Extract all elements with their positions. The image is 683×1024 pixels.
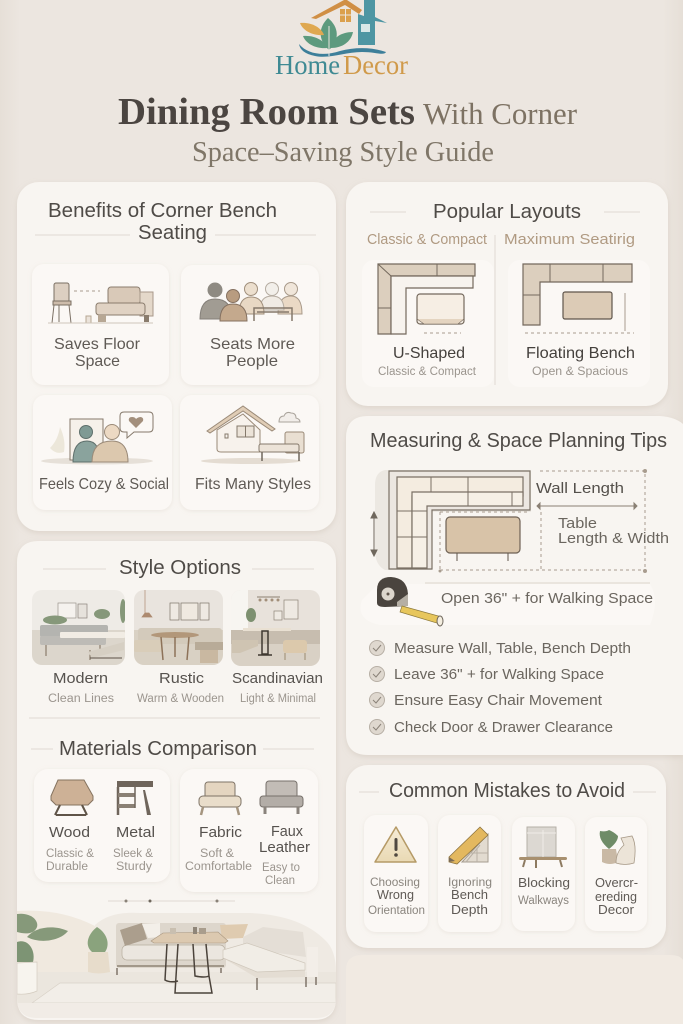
card: floating bench — [508, 260, 650, 387]
check item: Check Door & Drawer Clearance — [394, 719, 613, 736]
icon: warning triangle — [375, 827, 416, 862]
panel: benefits of corner bench seating — [17, 182, 336, 531]
card: fabric and faux leather: Faux — [271, 823, 303, 840]
photo: modern — [32, 590, 126, 665]
heading: benefits: Seating — [138, 222, 207, 244]
card: wrong orientation: Wrong — [377, 887, 414, 902]
style labels: Modern — [53, 670, 108, 687]
card: blocking walkways: Walkways — [518, 895, 569, 907]
card: feels cozy and social: Feels Cozy & Social — [39, 476, 169, 493]
card: fits many styles — [180, 395, 319, 510]
card: blocking walkways: Blocking — [518, 875, 570, 890]
card: wood and metal — [34, 769, 170, 882]
heading: materials comparison: Materials Comparison — [59, 738, 257, 760]
icon: tape measure — [377, 577, 443, 626]
check item: Leave 36" + for Walking Space — [394, 666, 604, 683]
card: fabric and faux leather: Soft & — [200, 848, 234, 860]
card: ignoring bench depth: Depth — [451, 902, 488, 917]
card: overcrowding decor: ereding — [595, 889, 637, 904]
subheads: Maximum Seatirig — [504, 231, 635, 248]
table — [151, 927, 228, 993]
measure labels: Wall Length — [536, 480, 624, 497]
heading: style options: Style Options — [119, 557, 241, 579]
card: saves floor space — [32, 264, 169, 385]
icon: plant and vases — [600, 830, 635, 864]
card: U-shaped — [362, 260, 494, 387]
card: blocking walkways — [512, 817, 575, 931]
plant: small — [88, 927, 110, 974]
title: Space–Saving Style Guide — [192, 136, 494, 168]
card: overcrowding decor: Decor — [598, 902, 635, 917]
card: fabric and faux leather — [180, 769, 318, 892]
check item: Ensure Easy Chair Movement — [394, 692, 603, 709]
card: wrong orientation: Choosing — [370, 875, 420, 889]
decorative lower right block — [346, 955, 683, 1024]
title — [118, 91, 578, 168]
card: floating bench: Floating Bench — [526, 345, 635, 362]
title: With Corner — [423, 96, 578, 131]
strip: walking space — [360, 584, 655, 625]
style labels — [48, 670, 323, 705]
heading: common mistakes: Common Mistakes to Avoid — [389, 780, 625, 802]
card: fabric and faux leather: Easy to — [262, 862, 300, 874]
style labels: Warm & Wooden — [137, 693, 224, 705]
card: seats more people: People — [226, 353, 278, 370]
photo: scandinavian — [231, 590, 320, 666]
card: ignoring bench depth: Ignoring — [448, 875, 492, 889]
heading: popular layouts: Popular Layouts — [433, 201, 581, 223]
logo: Home Decor — [275, 0, 408, 80]
heading: benefits: Benefits of Corner Bench — [48, 200, 277, 222]
plant: large — [17, 914, 68, 994]
style labels: Light & Minimal — [240, 693, 316, 705]
subheads — [367, 231, 635, 248]
card: wood and metal: Durable — [46, 861, 88, 873]
icon: house and leaves — [299, 0, 387, 57]
strip: walking space: Open 36" + for Walking Space — [441, 590, 653, 607]
style labels: Clean Lines — [48, 693, 114, 705]
card: fits many styles: Fits Many Styles — [195, 476, 311, 493]
icon: two people with speech bubble — [41, 412, 153, 464]
card: floating bench: Open & Spacious — [532, 366, 628, 378]
heading: benefits — [48, 200, 277, 244]
card: overcrowding decor — [585, 817, 647, 931]
card: fabric and faux leather: Comfortable — [185, 861, 252, 873]
style labels: Rustic — [159, 670, 205, 687]
icon: metal — [117, 781, 153, 815]
icon: blocked door and bench — [519, 827, 567, 868]
icon: faux leather chair — [260, 781, 303, 814]
logo wordmark: Decor — [343, 50, 408, 80]
card: wood and metal: Sturdy — [116, 861, 152, 873]
logo wordmark: Home — [275, 50, 340, 80]
checklist — [370, 640, 631, 736]
panel: popular layouts — [346, 182, 668, 406]
measure labels — [536, 480, 669, 547]
card: ignoring bench depth — [438, 815, 501, 932]
sofa — [116, 923, 318, 990]
card: feels cozy and social — [33, 395, 172, 510]
diagram: U-shaped — [378, 264, 475, 334]
card: overcrowding decor: Overcr- — [595, 875, 638, 890]
card: wood and metal: Classic & — [46, 848, 94, 860]
card: fabric and faux leather: Leather — [259, 839, 310, 856]
diagram: floating bench — [523, 264, 634, 333]
panel: measuring and space planning tips — [346, 416, 683, 755]
check item: Measure Wall, Table, Bench Depth — [394, 640, 631, 657]
card: wood and metal: Wood — [49, 824, 90, 841]
illustration: living room scene — [17, 911, 336, 1020]
style labels: Scandinavian — [232, 670, 323, 687]
panel: common mistakes to avoid — [346, 765, 666, 948]
subheads: Classic & Compact — [367, 231, 488, 248]
card: fabric and faux leather: Fabric — [199, 824, 243, 841]
icon: chair and sofa — [48, 283, 153, 323]
icon: fabric chair — [199, 782, 241, 815]
icon: wood — [51, 780, 93, 815]
measure labels: Table — [558, 515, 597, 532]
card: seats more people — [181, 265, 319, 385]
card: U-shaped: U-Shaped — [393, 345, 465, 362]
photo: rustic — [134, 590, 223, 665]
icon: house with bench — [201, 406, 304, 464]
panel: style options and materials — [17, 541, 336, 1020]
card: ignoring bench depth: Bench — [451, 887, 488, 902]
measure labels: Length & Width — [558, 530, 669, 547]
card: fabric and faux leather: Clean — [265, 875, 295, 887]
diagram: corner bench plan — [371, 469, 650, 583]
card: wood and metal: Sleek & — [113, 848, 153, 860]
icon: pencil and ruler — [449, 827, 488, 864]
title: Dining Room Sets — [118, 91, 415, 133]
card: U-shaped: Classic & Compact — [378, 366, 477, 378]
icon: group of people — [200, 282, 302, 321]
card: wrong orientation: Orientation — [368, 905, 425, 917]
card: saves floor space: Saves Floor — [54, 336, 141, 353]
heading: measuring: Measuring & Space Planning Tips — [370, 430, 667, 452]
card: saves floor space: Space — [75, 353, 120, 370]
card: wood and metal: Metal — [116, 824, 155, 841]
card: seats more people: Seats More — [210, 336, 295, 353]
card: wrong orientation — [364, 815, 428, 932]
